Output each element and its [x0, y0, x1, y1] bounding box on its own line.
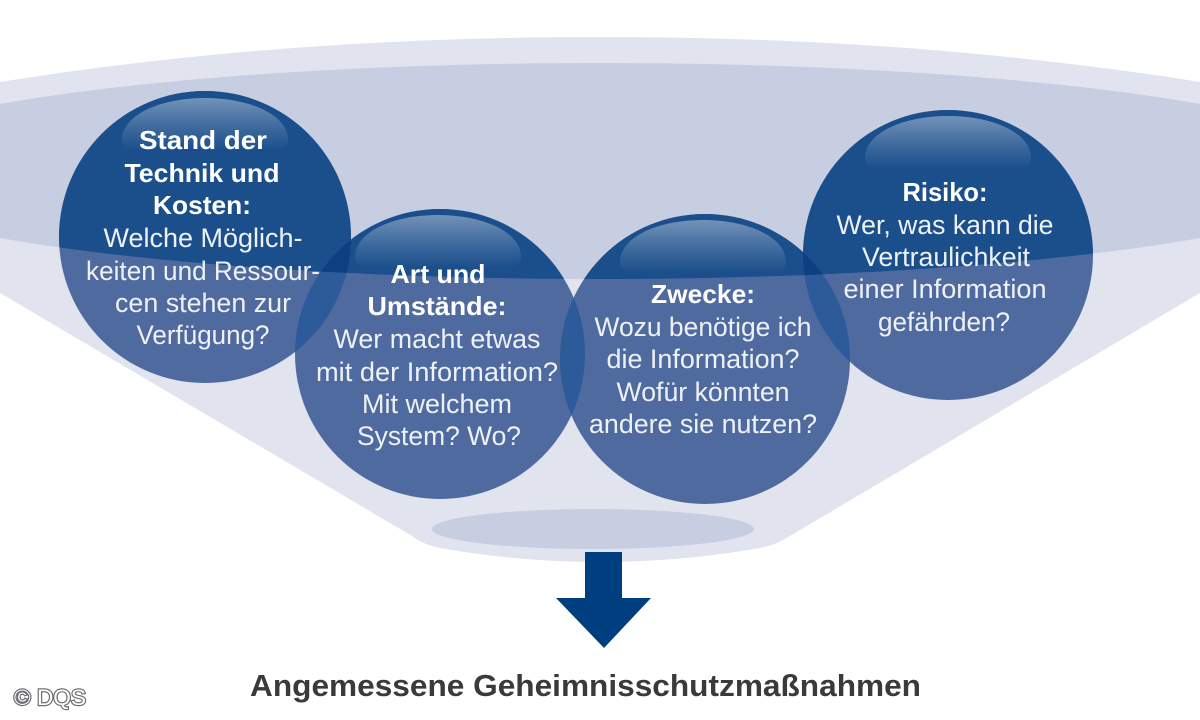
funnel body	[0, 37, 1200, 562]
text: Stand der Technik und Kosten: Verfügung?	[136, 320, 270, 350]
text: Stand der Technik und Kosten: cen stehen zur	[115, 288, 291, 318]
text: Stand der Technik und Kosten	[86, 125, 320, 350]
text: Risiko: gefährden?	[878, 307, 1010, 337]
text: Risiko: Risiko:	[902, 177, 988, 207]
funnel opening	[0, 63, 1200, 279]
bubble: Stand der Technik	[59, 91, 351, 383]
text: Stand der Technik und Kosten: Stand der	[139, 125, 267, 155]
text: Stand der Technik und Kosten: Kosten:	[153, 190, 251, 220]
text: Art und Umstände: Art und	[390, 259, 486, 289]
text: Stand der Technik und Kosten: keiten und Ressour-	[86, 256, 320, 286]
text: Art und Umstände: mit der Information?	[316, 357, 558, 387]
bubble overlaps	[295, 110, 1093, 504]
text: Risiko: Vertraulichkeit	[862, 242, 1030, 272]
text: Zwecke: Wofür könnten	[616, 377, 790, 407]
text: Zwecke: die Information?	[606, 344, 800, 374]
text: Art und Umstände: Umstände:	[368, 291, 506, 321]
funnel outlet	[432, 509, 754, 549]
text: Risiko: einer Information	[844, 274, 1046, 304]
text: Zwecke: andere sie nutzen?	[589, 409, 817, 439]
arrow	[556, 552, 651, 648]
text: Art und Umstände: Wer macht etwas	[334, 324, 540, 354]
bubble: Zwecke	[560, 214, 850, 504]
text: Zwecke: Zwecke:	[651, 279, 755, 309]
text: Zwecke	[589, 279, 817, 439]
conclusion label: Angemessene Geheimnisschutzmaßnahmen	[250, 668, 921, 703]
text: Art und Umstände	[316, 259, 558, 451]
text: Stand der Technik und Kosten: Welche Möglich-	[104, 223, 302, 253]
text: Art und Umstände: Mit welchem	[362, 389, 512, 419]
text: Stand der Technik und Kosten: Technik und	[124, 158, 280, 188]
text: Art und Umstände: System? Wo?	[357, 421, 521, 451]
copyright: © DQS	[14, 685, 86, 710]
bubble: Art und Umstände	[295, 209, 585, 499]
text: Zwecke: Wozu benötige ich	[594, 312, 812, 342]
text: Risiko: Wer, was kann die	[836, 210, 1054, 240]
bubble: Risiko	[803, 110, 1093, 400]
funnel	[0, 37, 1200, 562]
text: Risiko	[836, 177, 1054, 337]
